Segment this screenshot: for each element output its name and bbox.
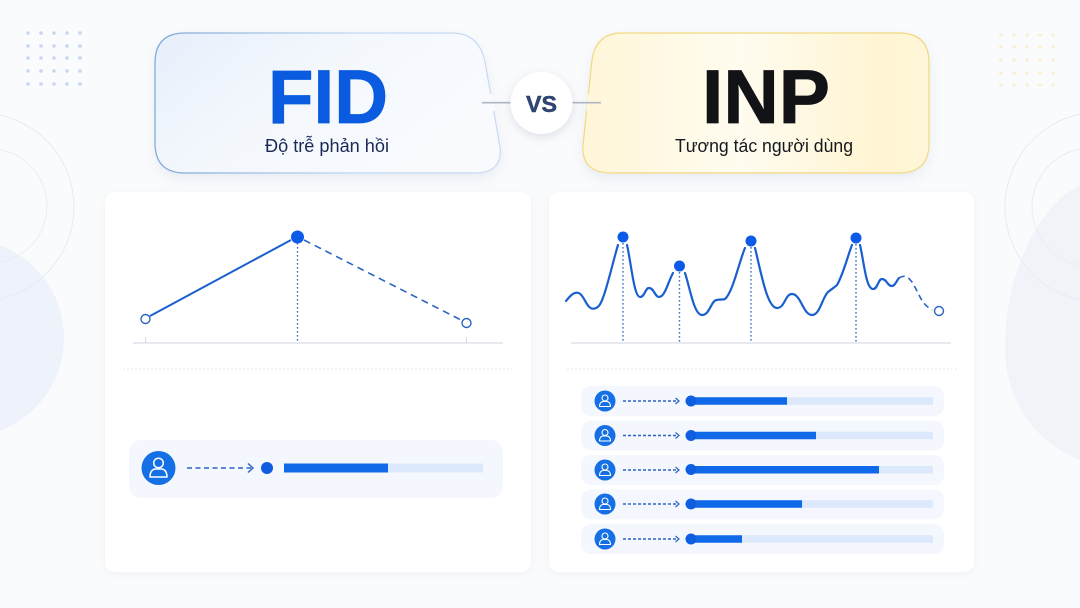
panel: INP details — [549, 192, 974, 572]
arrow: input to response — [187, 464, 253, 472]
icon: user — [142, 451, 176, 485]
decorative yellow dot grid — [999, 33, 1055, 87]
interaction row 1 — [581, 386, 944, 416]
panel: FID header card — [155, 33, 500, 173]
decorative left blob and rings — [0, 113, 74, 437]
panel: INP header card — [583, 33, 929, 173]
interaction row: single user — [129, 440, 503, 498]
interaction row 3 — [581, 455, 944, 485]
subtitle: FID: Độ trễ phản hồi — [265, 135, 389, 156]
line chart: single FID peak — [133, 230, 503, 343]
heading: FID: FID — [268, 55, 388, 140]
interaction row 2 — [581, 420, 944, 450]
interaction row 4 — [581, 490, 944, 520]
decorative right blob and rings — [1005, 112, 1080, 460]
interaction row 5 — [581, 524, 944, 554]
progress bar — [284, 464, 483, 472]
VS label: VS — [526, 91, 557, 117]
decorative blue dot grid — [26, 31, 82, 86]
line chart: multiple INP peaks — [566, 232, 951, 343]
VS badge with connectors — [482, 72, 601, 134]
subtitle: INP: Tương tác người dùng — [675, 136, 853, 156]
heading: INP: INP — [702, 55, 830, 140]
panel: FID details — [105, 192, 531, 572]
